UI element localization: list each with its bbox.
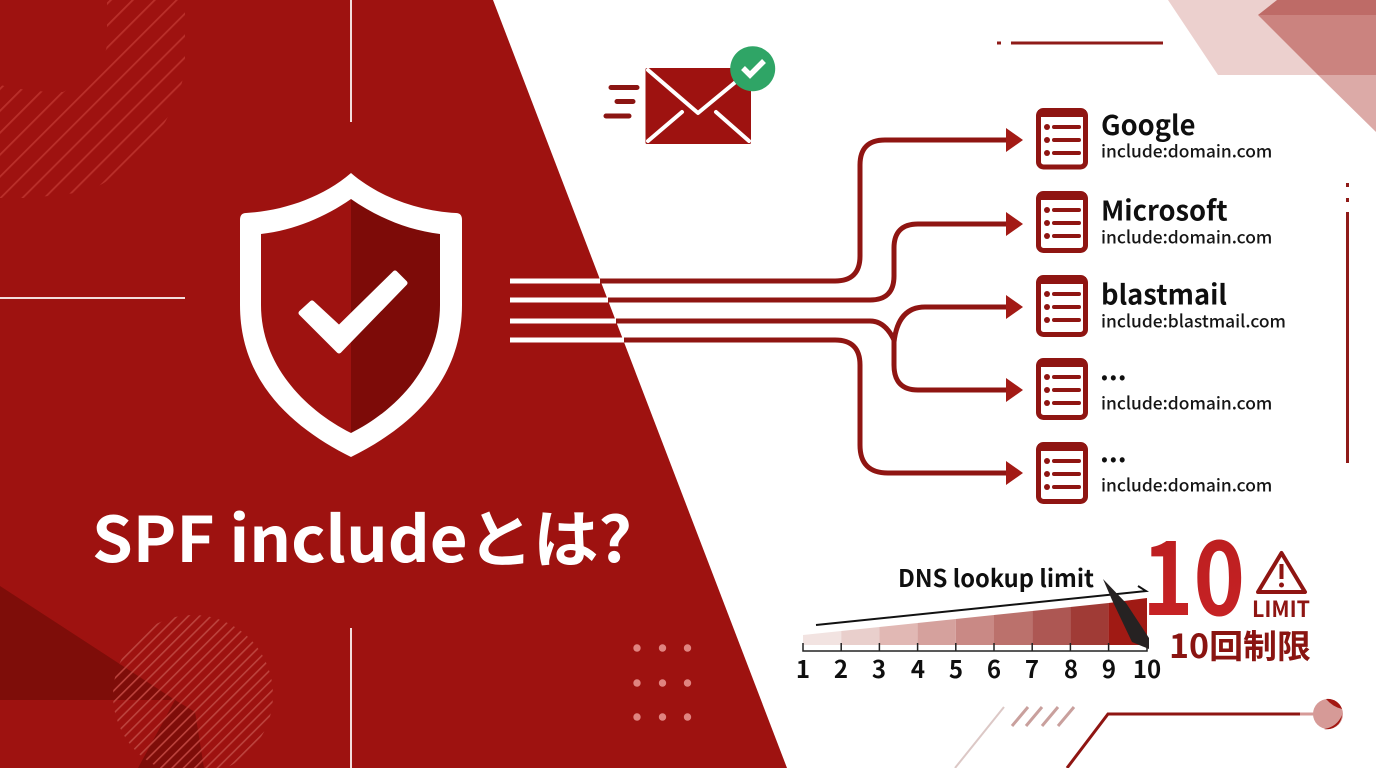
icon: shield with check	[240, 173, 462, 457]
icon: warning triangle	[1258, 553, 1305, 592]
callout: 10 limit	[1142, 499, 1311, 668]
chart bars	[803, 598, 1147, 645]
item: blastmail: include:blastmail.com	[1101, 308, 1286, 334]
icon: speed lines	[606, 88, 637, 116]
icon: list document	[1038, 277, 1086, 334]
icon: green badge	[730, 46, 775, 91]
chart label: DNS lookup limit	[898, 559, 1094, 594]
connector: white lines on red	[510, 278, 624, 342]
item: Google	[1038, 103, 1272, 167]
axis labels: 4	[911, 650, 925, 685]
decoration: top-right facets	[1168, 0, 1376, 132]
arrow: to last include	[624, 340, 1023, 485]
item: fifth include: ...	[1100, 430, 1127, 470]
arrow: to Microsoft	[608, 212, 1023, 300]
item: fifth include: include:domain.com	[1101, 472, 1272, 498]
item: fifth include	[1038, 430, 1272, 502]
axis labels: 10	[1133, 650, 1161, 685]
callout: 10 limit: LIMIT	[1252, 592, 1310, 624]
axis labels: 1	[796, 650, 810, 685]
axis labels: 7	[1025, 650, 1039, 685]
axis labels: 8	[1064, 650, 1078, 685]
title: SPF includeとは?	[92, 490, 632, 581]
item: fourth include: include:domain.com	[1101, 390, 1272, 416]
arrow: to Google	[600, 128, 1023, 281]
trend arrow	[816, 586, 1146, 625]
icon: list document	[1038, 360, 1086, 418]
arrows: include branches	[600, 128, 1023, 485]
callout: 10 limit: 10	[1142, 499, 1245, 644]
axis labels: 3	[872, 650, 886, 685]
decoration: bottom-left dark facets	[0, 586, 204, 768]
icon: end node circle	[1313, 699, 1343, 729]
item: blastmail: blastmail	[1101, 272, 1227, 312]
axis labels: 2	[834, 650, 848, 685]
pointer arrow	[1103, 579, 1149, 649]
axis labels: 6	[987, 650, 1001, 685]
item: fourth include	[1038, 348, 1272, 418]
icon: envelope with green check	[606, 46, 775, 144]
axis labels	[796, 650, 1161, 685]
axis labels: 9	[1102, 650, 1116, 685]
item: Google: Google	[1101, 103, 1196, 143]
decoration: bottom-left striped circle	[113, 615, 273, 768]
panel: red diagonal background	[0, 0, 787, 768]
decoration: dot grid	[633, 644, 691, 721]
chart: DNS lookup limit ramp	[796, 559, 1161, 685]
callout: 10 limit: 10回制限	[1169, 620, 1311, 668]
item: Microsoft	[1038, 188, 1272, 250]
item: Google: include:domain.com	[1101, 138, 1272, 164]
item: Microsoft: include:domain.com	[1101, 224, 1272, 250]
axis labels: 5	[949, 650, 963, 685]
arrow: to blastmail and next include	[616, 295, 1023, 402]
icon: list document	[1038, 193, 1086, 250]
chart axis	[803, 643, 1147, 651]
decoration: top-left striped arc	[0, 0, 185, 198]
icon: list document	[1038, 110, 1086, 167]
decoration: bottom-right circuit lines	[955, 699, 1343, 768]
item: blastmail	[1038, 272, 1286, 334]
item: Microsoft: Microsoft	[1101, 188, 1228, 228]
icon: list document	[1038, 444, 1086, 502]
item: fourth include: ...	[1100, 348, 1127, 388]
